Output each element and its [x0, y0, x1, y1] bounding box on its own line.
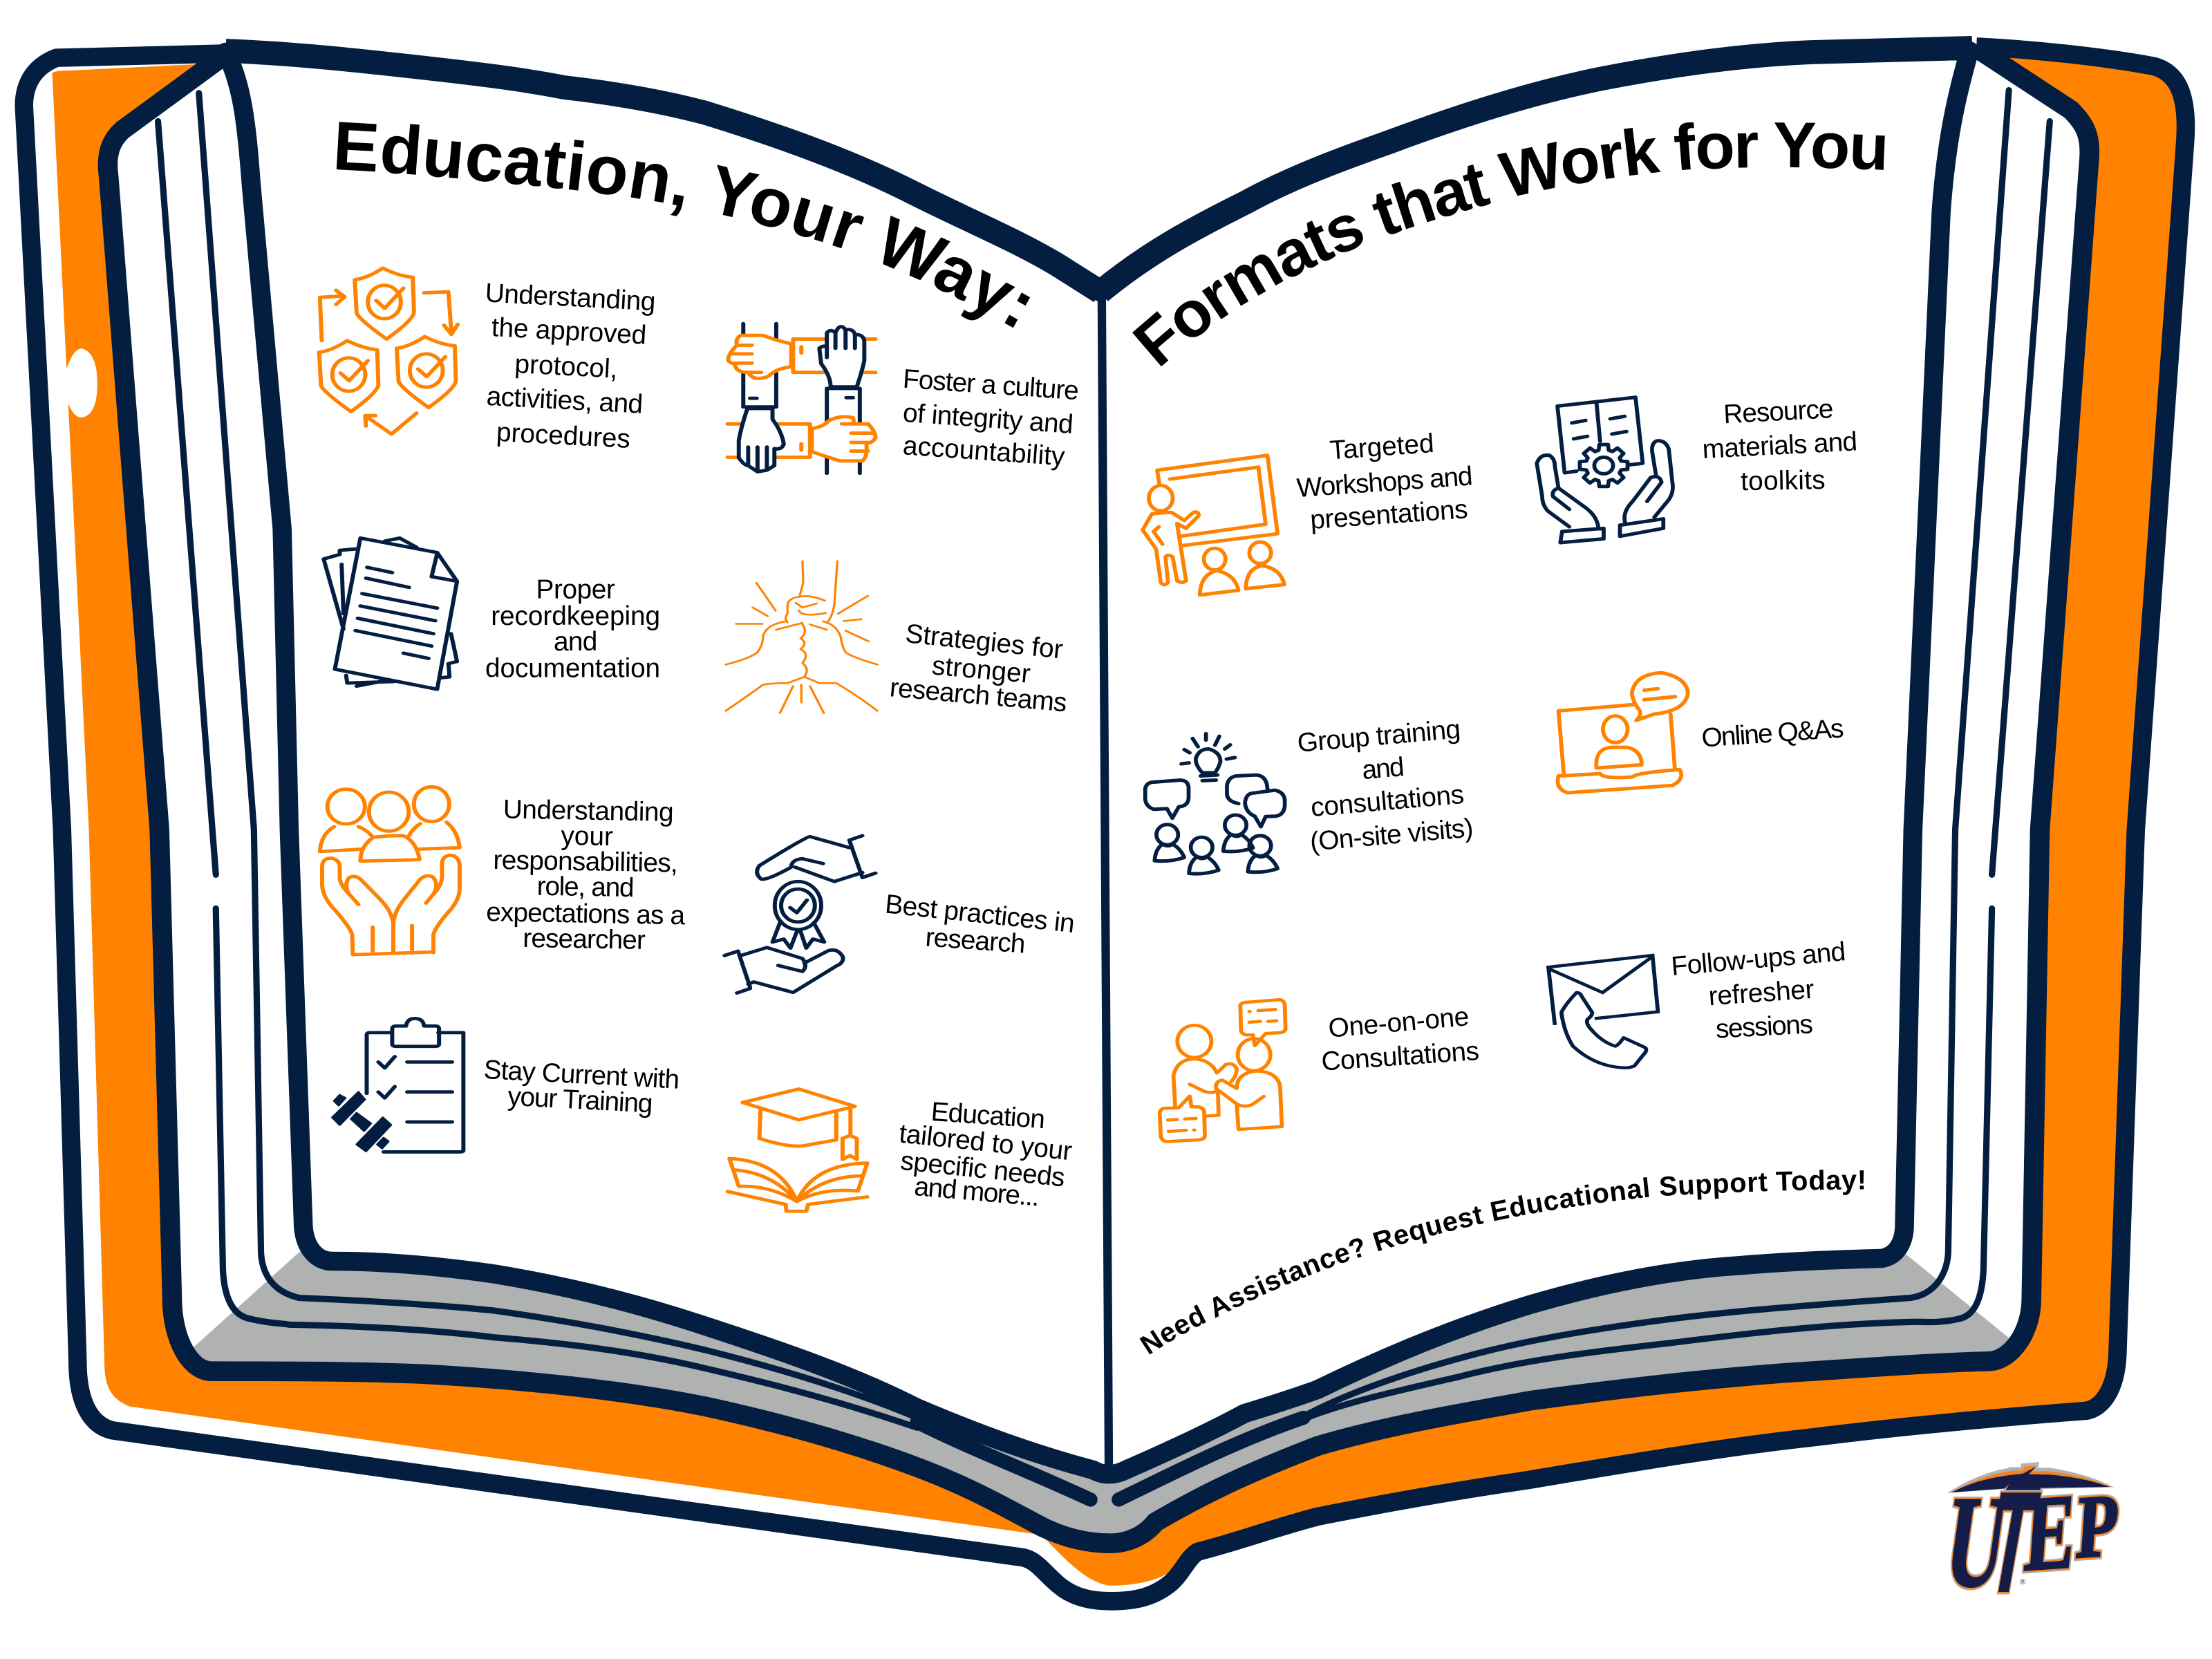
text: best practices: Best practices in [883, 889, 1076, 939]
logo letters: E [2021, 1472, 2079, 1593]
text: responsibilities [486, 795, 686, 955]
icon: interlocked hands [728, 324, 876, 474]
logo letters: T [1978, 1463, 2047, 1622]
logo letters: E [2021, 1472, 2079, 1593]
text: workshops: Workshops and [1295, 461, 1474, 503]
text: group training: Group training [1296, 714, 1462, 758]
text: stay current: Stay Current with [483, 1055, 680, 1095]
text: resource materials: Resource [1723, 394, 1834, 429]
text: workshops: presentations [1309, 494, 1469, 535]
logo letters: T [1978, 1463, 2047, 1622]
logo letters: U [1937, 1470, 2016, 1615]
text: protocol understanding: procedures [496, 418, 631, 454]
text: follow-ups: Follow-ups and [1670, 937, 1847, 982]
icon: laptop with chat [1557, 673, 1688, 793]
text: one-on-one: Consultations [1320, 1036, 1480, 1077]
text: integrity culture: Foster a culture [902, 364, 1080, 406]
icon: envelope and phone [1548, 955, 1658, 1068]
text: recordkeeping: and [554, 627, 597, 657]
right page line two [1304, 91, 2009, 1416]
top edge right [1100, 48, 1972, 292]
text: research teams: Strategies for [904, 619, 1065, 665]
text: group training: (On-site visits) [1309, 813, 1474, 857]
text: tailored education: tailored to your [898, 1118, 1074, 1166]
text: follow-ups: refresher [1707, 975, 1815, 1011]
text: responsibilities: your [561, 821, 613, 852]
logo letters: E [2021, 1472, 2079, 1593]
text: responsibilities: expectations as a [486, 897, 686, 930]
center spine [1102, 299, 1109, 1470]
icon: clipboard and dumbbell [332, 1018, 463, 1152]
white binding notch [66, 348, 97, 418]
text: group training: and [1361, 752, 1405, 785]
logo letters: P [2074, 1475, 2121, 1577]
call to action: Need Assistance? Request Educational Support Today! [1139, 1170, 1864, 1355]
text: one-on-one [1320, 1002, 1480, 1077]
right page line one [1304, 122, 2050, 1419]
text: integrity culture: of integrity and [902, 398, 1074, 440]
icon: shields with arrows [319, 268, 458, 434]
icon: group ideas [1145, 733, 1285, 874]
title: Formats that Work for You: Formats that Work for You [1132, 122, 1885, 366]
text: tailored education [898, 1097, 1074, 1212]
text: research teams [888, 619, 1068, 718]
title: Education, Your Way: Education, Your Way: [336, 122, 1030, 328]
UTEP logo [1937, 1462, 2121, 1622]
text: responsibilities: role, and [536, 872, 635, 903]
text: recordkeeping [485, 574, 660, 684]
text: responsibilities: researcher [523, 924, 646, 955]
logo letters: P [2074, 1475, 2121, 1577]
icon: fist bump [726, 561, 877, 713]
right lower gutter line [1118, 1418, 1304, 1499]
left lower gutter line [917, 1422, 1091, 1499]
text: integrity culture [902, 364, 1080, 472]
text: research teams: research teams [888, 673, 1068, 718]
top edge left [226, 50, 1100, 292]
icon: hands with award [724, 836, 876, 993]
text: responsibilities: responsabilities, [493, 845, 678, 879]
text: protocol understanding: protocol, [514, 349, 619, 384]
text: tailored education: Education [930, 1097, 1046, 1134]
text: responsibilities: Understanding [503, 795, 674, 827]
icon: one-on-one consultation [1160, 1000, 1286, 1141]
logo letters [1937, 1463, 2121, 1622]
text: resource materials: toolkits [1741, 465, 1826, 496]
text: group training: consultations [1309, 780, 1465, 823]
text: resource materials [1702, 394, 1858, 496]
text: research teams: stronger [930, 651, 1032, 689]
registered mark: ® [2020, 1578, 2025, 1586]
text: stay current: your Training [507, 1082, 654, 1119]
text: best practices: research [924, 922, 1027, 959]
text: recordkeeping: recordkeeping [491, 601, 660, 631]
text: recordkeeping: Proper [536, 574, 615, 604]
logo letters: U [1937, 1470, 2016, 1615]
icon: book, gear and hands [1537, 397, 1673, 543]
text: tailored education: and more... [913, 1172, 1041, 1212]
text: protocol understanding: activities, and [486, 382, 644, 420]
text: one-on-one: One-on-one [1327, 1002, 1470, 1044]
text: workshops: Targeted [1329, 429, 1435, 465]
text: protocol understanding: the approved [491, 312, 647, 350]
text: online Q&As: Online Q&As [1700, 713, 1845, 753]
text: stay current [483, 1055, 680, 1119]
main page [226, 50, 1969, 1474]
text: resource materials: materials and [1702, 427, 1858, 465]
icon: graduation cap and book [728, 1089, 868, 1211]
text: recordkeeping: documentation [485, 654, 660, 684]
text: workshops [1295, 429, 1474, 535]
icon: people in hands [320, 787, 460, 955]
grey page edges [191, 1248, 2012, 1544]
left page line one [158, 122, 917, 1427]
text: group training [1296, 714, 1474, 857]
logo letters: U [1937, 1470, 2016, 1615]
text: follow-ups [1670, 937, 1847, 1044]
text: tailored education: specific needs [899, 1146, 1067, 1193]
left page line two [199, 93, 917, 1418]
text: protocol understanding: Understanding [485, 278, 657, 317]
text: integrity culture: accountability [902, 431, 1066, 472]
text: protocol understanding [485, 278, 657, 454]
text: follow-ups: sessions [1715, 1009, 1814, 1044]
icon: presenter with audience [1143, 456, 1284, 595]
icon: stacked documents [324, 538, 457, 689]
logo letters: P [2074, 1475, 2121, 1577]
logo letters: T [1978, 1463, 2047, 1622]
